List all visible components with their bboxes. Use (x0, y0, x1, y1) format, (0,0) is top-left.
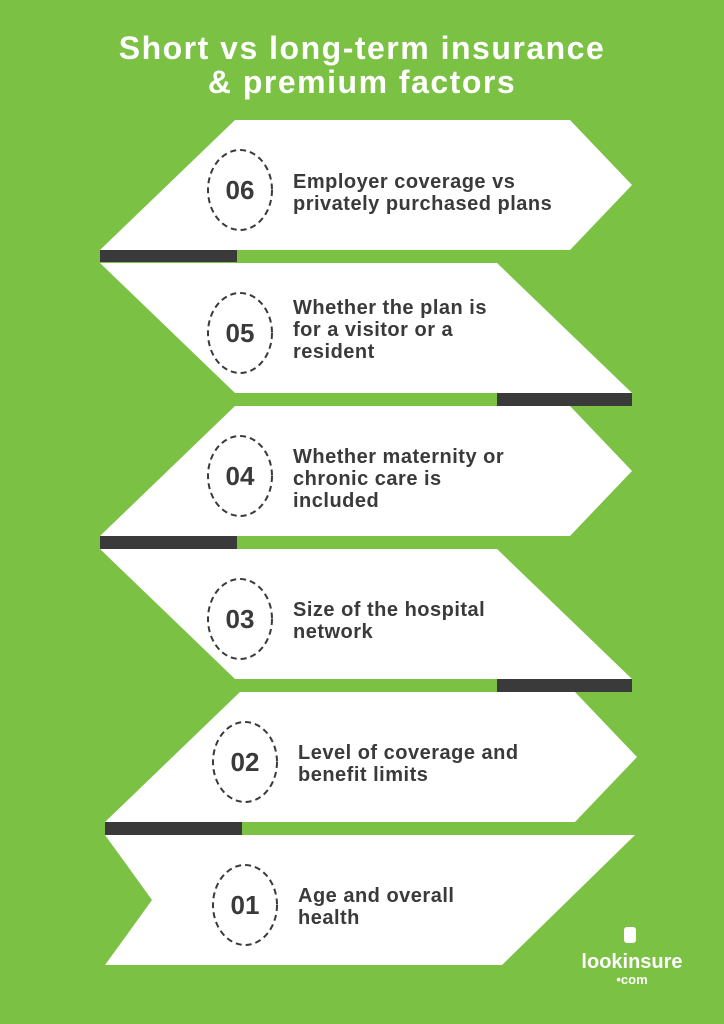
step 06: privately purchased plans (293, 193, 552, 215)
step 05: 05 (226, 318, 254, 348)
step 05 (100, 263, 632, 406)
step 02 (105, 692, 637, 835)
title (119, 30, 605, 100)
step 06: 06 (226, 175, 254, 205)
step 04: included (293, 490, 379, 512)
step 04: Whether maternity or (293, 446, 504, 468)
step 06: Employer coverage vs (293, 171, 515, 193)
step 05: resident (293, 341, 375, 363)
step 03: network (293, 621, 374, 643)
step 04: 04 (226, 461, 255, 491)
step 05: for a visitor or a (293, 319, 454, 341)
step 06 (100, 120, 632, 262)
step 02: benefit limits (298, 764, 428, 786)
logo: lookinsure (581, 951, 683, 973)
step 03: Size of the hospital (293, 599, 485, 621)
step 03: 03 (226, 604, 254, 634)
step 04 (100, 406, 632, 549)
step 03 (100, 549, 632, 692)
step 01: 01 (231, 890, 259, 920)
step 01: health (298, 907, 360, 929)
logo: •com (616, 972, 648, 987)
title: Short vs long-term insurance (119, 30, 605, 66)
step 04: chronic care is (293, 468, 442, 490)
step 02: 02 (231, 747, 259, 777)
title: & premium factors (208, 64, 516, 100)
step 01: Age and overall (298, 885, 454, 907)
step 01 (105, 835, 635, 965)
step 02: Level of coverage and (298, 742, 519, 764)
step 05: Whether the plan is (293, 297, 487, 319)
logo (581, 927, 683, 987)
